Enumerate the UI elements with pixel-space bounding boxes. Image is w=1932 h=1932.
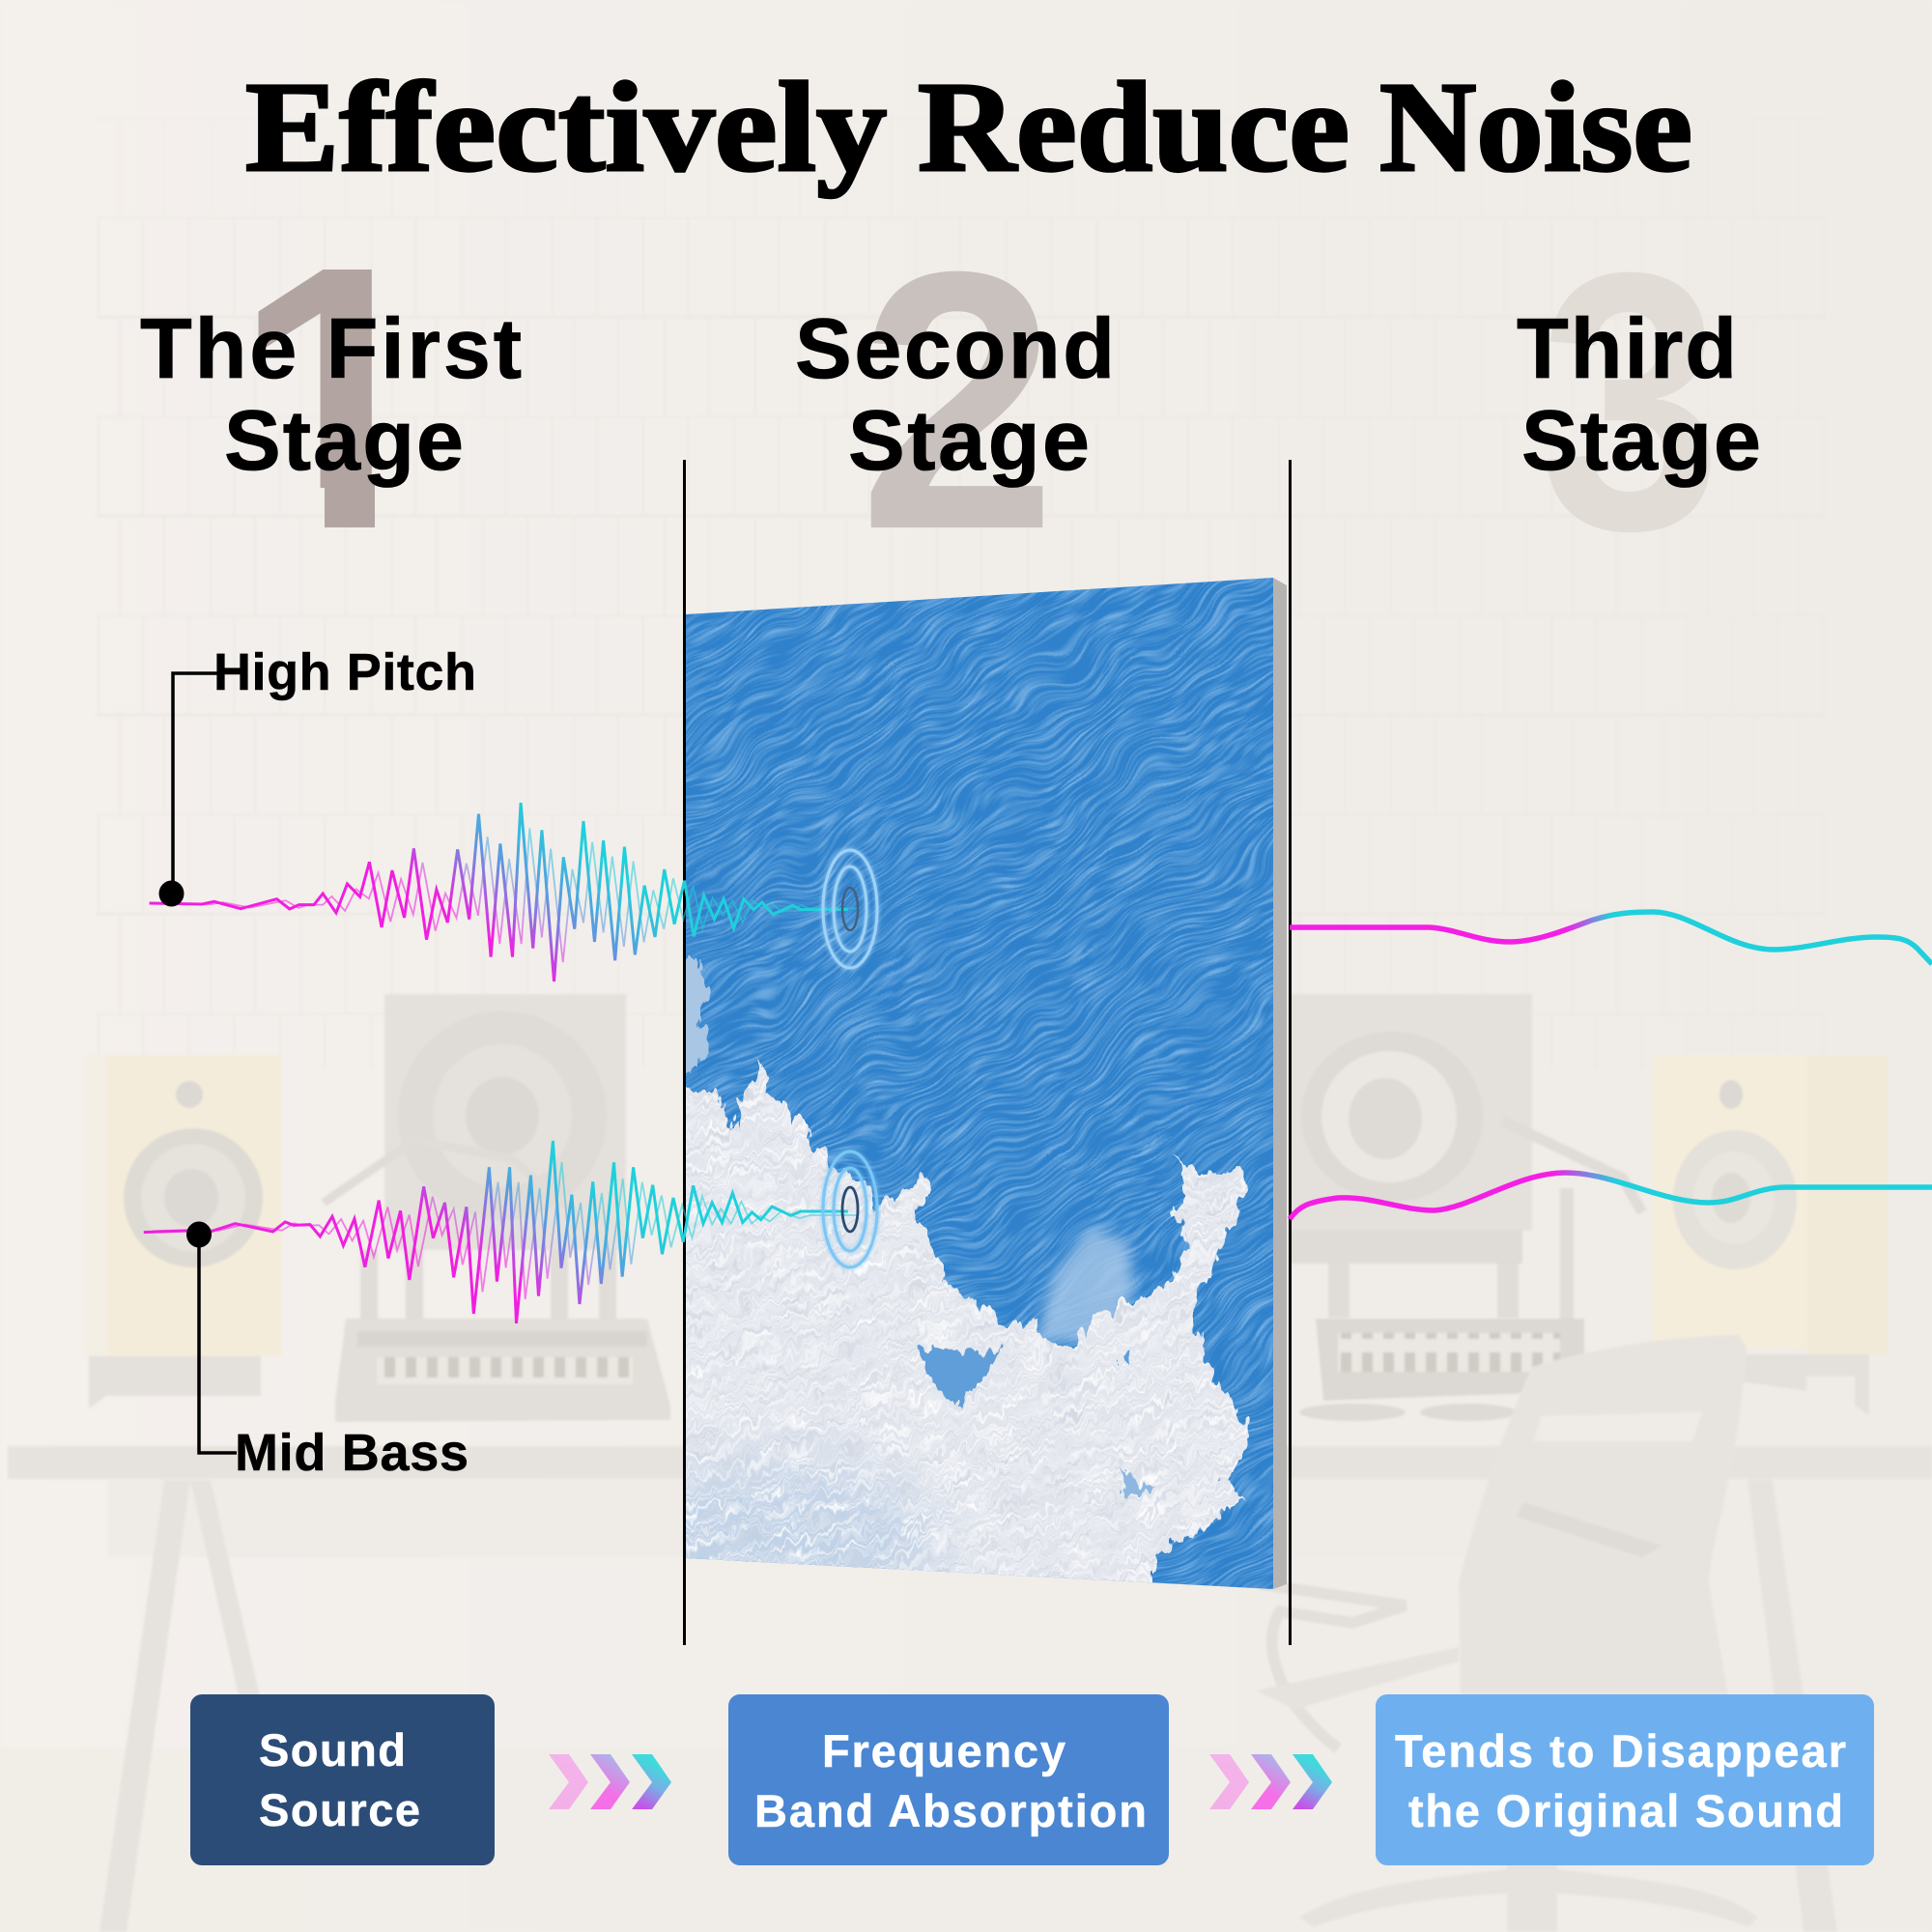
right yellow speaker xyxy=(1653,1055,1888,1415)
large stage numeral 1 xyxy=(259,270,375,527)
title xyxy=(245,55,1692,198)
divider line left xyxy=(683,460,686,1645)
box: frequency band absorption xyxy=(728,1694,1169,1865)
box: tends to disappear: Tends to Disappear xyxy=(1395,1725,1846,1776)
heading: second stage xyxy=(795,300,1115,488)
right grey speaker and stand xyxy=(1291,994,1642,1323)
left yellow speaker xyxy=(84,1055,282,1408)
mid bass waveform xyxy=(144,1141,857,1323)
box: sound source xyxy=(190,1694,495,1865)
residual wave: high pitch xyxy=(1290,912,1932,964)
heading: the first stage: Stage xyxy=(224,392,464,488)
large stage numeral 2: 2 xyxy=(859,195,1057,606)
callout: mid bass xyxy=(186,1221,469,1482)
left grey speaker and stand xyxy=(324,994,626,1322)
panel front with sky print xyxy=(686,578,1273,1589)
heading: second stage: Second xyxy=(795,300,1115,396)
heading: third stage: Third xyxy=(1517,300,1737,396)
residual wave: mid bass xyxy=(1290,1173,1932,1219)
office chair xyxy=(1256,1335,1758,1932)
heading: third stage xyxy=(1517,300,1761,488)
box: frequency band absorption: Frequency xyxy=(822,1725,1065,1776)
title: Effectively xyxy=(245,55,887,198)
box: sound source: Sound xyxy=(259,1724,406,1776)
title: Noise xyxy=(1379,55,1692,198)
heading: the first stage xyxy=(140,300,522,488)
large stage numeral 3: 3 xyxy=(1539,196,1722,607)
right keyboard xyxy=(1299,1319,1584,1421)
box: tends to disappear xyxy=(1376,1694,1874,1865)
cloud mass xyxy=(686,1059,1250,1582)
arrows: second chevrons xyxy=(1209,1754,1332,1809)
rings: mid bass absorption point xyxy=(823,1151,877,1267)
box: frequency band absorption: Band Absorption xyxy=(754,1785,1147,1836)
box: tends to disappear: the Original Sound xyxy=(1408,1785,1843,1836)
large stage numeral 1: 1 xyxy=(233,189,441,608)
box: sound source: Source xyxy=(259,1784,420,1835)
left edge cloud wisp xyxy=(686,955,711,1073)
desk top xyxy=(8,1446,1932,1479)
desk legs xyxy=(99,1480,1837,1932)
heading: second stage: Stage xyxy=(848,392,1090,488)
heading: the first stage: The First xyxy=(140,300,522,396)
arrows: first chevrons xyxy=(549,1754,671,1809)
under desk shelf xyxy=(108,1480,1851,1557)
callout: high pitch: High Pitch xyxy=(213,643,476,701)
left keyboard xyxy=(335,1319,670,1422)
callout: high pitch xyxy=(158,643,476,906)
acoustic panel xyxy=(686,578,1287,1589)
rings: high pitch absorption point xyxy=(823,850,877,968)
high pitch waveform xyxy=(150,803,857,981)
heading: third stage: Stage xyxy=(1521,392,1761,488)
title: Reduce xyxy=(918,55,1350,198)
callout: mid bass: Mid Bass xyxy=(235,1424,469,1482)
divider line right xyxy=(1289,460,1292,1645)
panel side edge xyxy=(1273,578,1287,1589)
translucent cloud wisp xyxy=(1037,1229,1132,1343)
